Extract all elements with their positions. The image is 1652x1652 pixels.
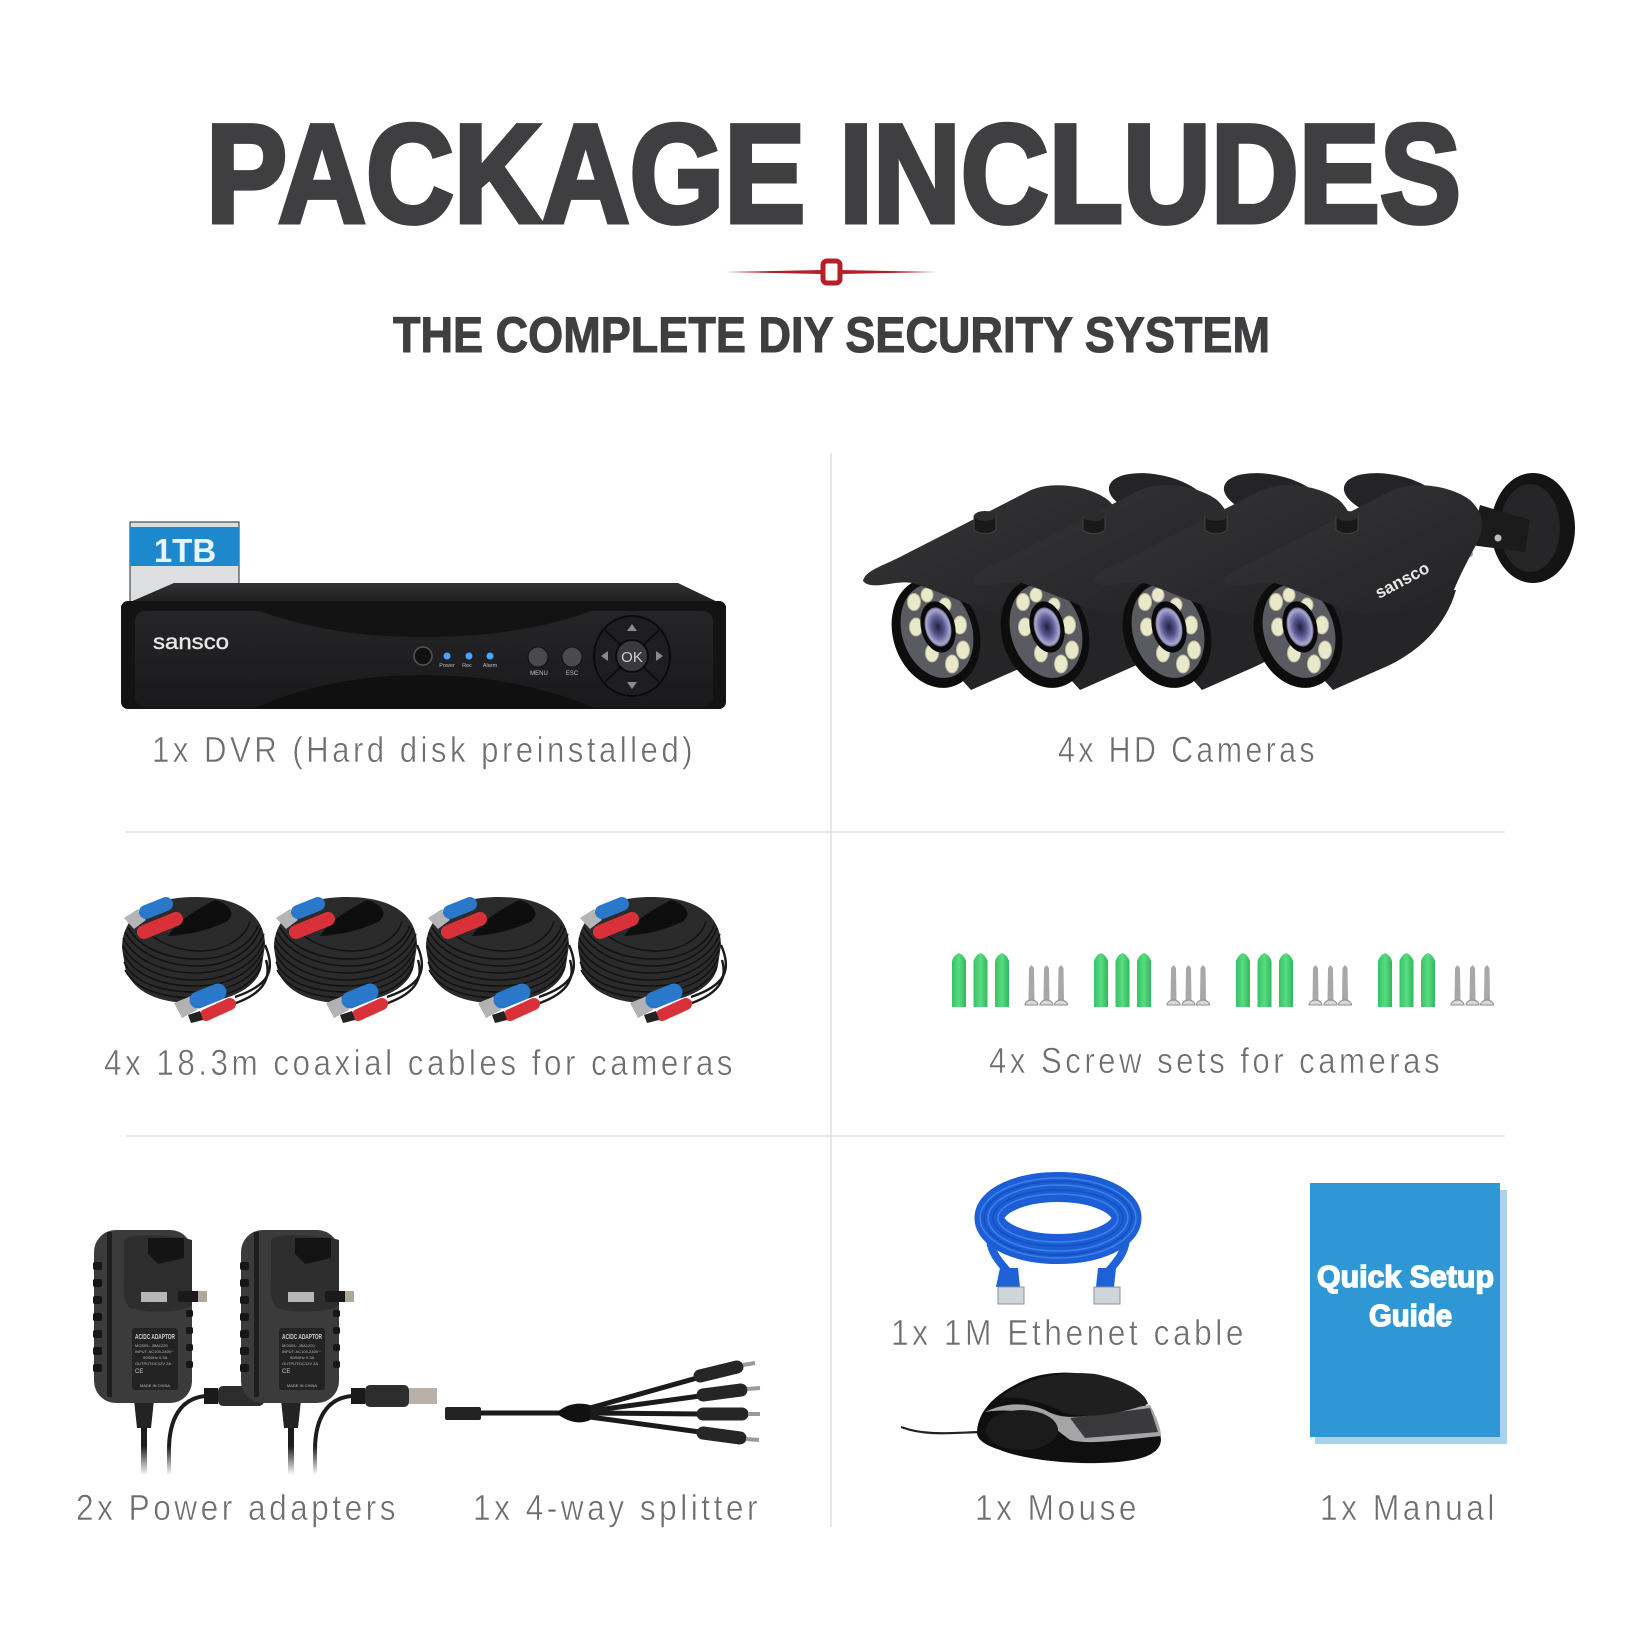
icon: second DC cord [315, 1385, 437, 1475]
panel: screw sets [952, 953, 1494, 1081]
icon: wall mount [1467, 473, 1575, 583]
icon: camera 1 [863, 485, 1120, 700]
label: ethernet cable: 1x 1M Ethenet cable [891, 1312, 1247, 1353]
icon: DVR recorder: MENU [530, 671, 548, 677]
title: PACKAGE INCLUDES [206, 95, 1461, 252]
panel: manual [1310, 1183, 1507, 1528]
icon: DVR recorder: ESC [566, 671, 579, 677]
icon: coil 2 [274, 897, 422, 1023]
icon: mouse [901, 1373, 1161, 1463]
icon: 1TB hard disk [130, 522, 239, 612]
icon: rear bumps [1105, 465, 1446, 529]
icon: screw set 4 [1378, 953, 1494, 1007]
icon: camera 2 [972, 485, 1229, 700]
panel: splitter [445, 1363, 761, 1528]
panel: power adapters [76, 1230, 437, 1528]
label: mouse: 1x Mouse [975, 1487, 1140, 1528]
red title divider [725, 261, 936, 283]
label: screw sets: 4x Screw sets for cameras [989, 1040, 1443, 1081]
icon: adapter 2 [240, 1230, 354, 1475]
icon: manual cover: Guide [1369, 1298, 1452, 1333]
icon: manual cover: Quick Setup [1317, 1259, 1494, 1294]
icon: camera 4 [1225, 485, 1482, 700]
icon: DVR recorder: Rec [462, 663, 472, 669]
icon: screw set 1 [952, 953, 1068, 1007]
icon: 1TB hard disk: 1TB [154, 532, 216, 569]
icon: coil 1 [122, 897, 270, 1023]
icon: coil 4 [578, 897, 726, 1023]
icon: screw set 3 [1236, 953, 1352, 1007]
icon: DVR recorder: Alarm [483, 663, 498, 669]
icon: adapter 1 [93, 1230, 207, 1475]
icon: manual cover [1310, 1183, 1500, 1437]
panel: ethernet cable [891, 1178, 1247, 1353]
icon: 4-way splitter [445, 1363, 760, 1440]
icon: DVR recorder: OK [621, 649, 643, 666]
panel: mouse [901, 1373, 1161, 1528]
icon: screw set 2 [1094, 953, 1210, 1007]
camera logo: sansco [1372, 558, 1433, 603]
subtitle: THE COMPLETE DIY SECURITY SYSTEM [393, 307, 1270, 363]
label: cameras: 4x HD Cameras [1058, 729, 1318, 770]
icon: camera 3 [1094, 485, 1351, 700]
icon: DVR recorder: sansco [153, 631, 229, 654]
label: manual: 1x Manual [1320, 1487, 1498, 1528]
panel: cameras [863, 465, 1575, 770]
label: power adapters: 2x Power adapters [76, 1487, 399, 1528]
icon: DVR recorder: Power [439, 663, 455, 669]
panel: coaxial cables [104, 897, 736, 1083]
panel: DVR [121, 522, 726, 770]
label: coaxial cables: 4x 18.3m coaxial cables for cameras [104, 1042, 736, 1083]
icon: manual shadow [1315, 1190, 1507, 1444]
icon: blue ethernet cable [980, 1178, 1136, 1304]
icon: first DC cord [169, 1386, 264, 1475]
label: splitter: 1x 4-way splitter [473, 1487, 761, 1528]
icon: coil 3 [426, 897, 574, 1023]
icon: DVR recorder [121, 583, 726, 709]
label: DVR: 1x DVR (Hard disk preinstalled) [152, 729, 696, 770]
